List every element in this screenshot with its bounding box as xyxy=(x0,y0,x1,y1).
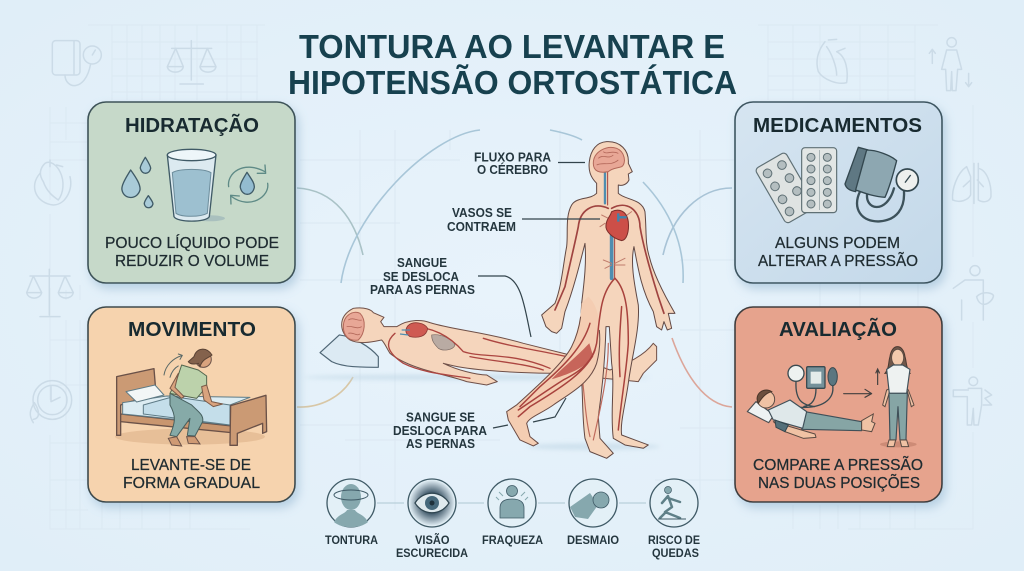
label: sangue se desloca para as pernas (lower): DESLOCA PARA xyxy=(393,424,487,438)
label: sangue se desloca para as pernas (lower): SANGUE SE xyxy=(406,410,475,424)
text: movimento description: LEVANTE-SE DE xyxy=(131,457,251,474)
symptom: tontura: TONTURA xyxy=(325,535,378,547)
heart xyxy=(606,210,629,241)
text: avaliação description: COMPARE A PRESSÃO xyxy=(753,454,923,474)
label: sangue se desloca para as pernas (upper) xyxy=(370,256,531,337)
panel: avaliação xyxy=(735,307,942,502)
stepping leg xyxy=(507,278,615,446)
symptom: risco de quedas xyxy=(648,479,700,560)
background icon: person with stomach xyxy=(953,266,993,320)
illustration: reclining body xyxy=(303,308,657,385)
text: avaliação description: NAS DUAS POSIÇÕES xyxy=(758,472,920,492)
lying figure xyxy=(342,308,657,385)
symptom: risco de quedas: QUEDAS xyxy=(652,548,699,560)
text: avaliação description xyxy=(753,454,923,492)
symptom: fraqueza xyxy=(482,479,543,547)
label: sangue se desloca para as pernas (lower): AS PERNAS xyxy=(406,437,475,451)
background icon: blood pressure cuff xyxy=(52,41,101,86)
standing figure xyxy=(542,142,675,458)
symptom: tontura xyxy=(325,479,378,547)
panel: medicamentos xyxy=(735,102,942,283)
text: movimento description: FORMA GRADUAL xyxy=(123,475,260,492)
arteries and veins xyxy=(555,170,664,440)
icon: water glass and drops xyxy=(122,149,268,221)
brain xyxy=(593,147,624,172)
panel: movimento xyxy=(88,307,295,502)
symptom: risco de quedas: RISCO DE xyxy=(648,535,700,547)
label: sangue se desloca para as pernas (upper): SANGUE xyxy=(397,256,447,270)
icon: pill blisters and cuff xyxy=(755,147,918,224)
text: movimento description xyxy=(123,457,260,492)
background icon: heart circulation xyxy=(35,160,71,205)
symptom: desmaio xyxy=(567,479,619,547)
label: vasos se contraem xyxy=(447,206,600,234)
symptom row xyxy=(325,479,700,560)
symptom: desmaio: DESMAIO xyxy=(567,535,619,547)
title: HIPOTENSÃO ORTOSTÁTICA xyxy=(288,64,737,101)
symptom: visão escurecida xyxy=(396,479,468,560)
label: fluxo para o cérebro xyxy=(474,150,585,177)
text: hidratação description: POUCO LÍQUIDO PODE xyxy=(105,233,279,252)
background icon: scale left xyxy=(27,269,73,317)
illustration: standing body with vessels xyxy=(507,142,675,458)
heading: movimento: MOVIMENTO xyxy=(128,319,256,341)
heading: avaliação: AVALIAÇÃO xyxy=(779,318,897,341)
label: fluxo para o cérebro: FLUXO PARA xyxy=(474,150,551,164)
background icon: person with arrows xyxy=(929,38,972,91)
background icon: scale top xyxy=(167,41,216,84)
text: medicamentos description: ALTERAR A PRESSÃO xyxy=(758,250,918,270)
label: sangue se desloca para as pernas (lower) xyxy=(393,398,566,451)
panel: hidratação xyxy=(88,102,295,283)
text: medicamentos description xyxy=(758,235,918,270)
symptom: visão escurecida: VISÃO xyxy=(415,534,450,547)
heading: hidratação: HIDRATAÇÃO xyxy=(125,114,259,137)
background icon: clock and drop xyxy=(30,381,72,423)
symptom: fraqueza: FRAQUEZA xyxy=(482,535,543,547)
label: sangue se desloca para as pernas (upper): SE DESLOCA xyxy=(383,270,459,284)
text: medicamentos description: ALGUNS PODEM xyxy=(775,235,900,252)
title xyxy=(288,28,737,101)
background icon: heart xyxy=(817,39,847,83)
text: hidratação description: REDUZIR O VOLUME xyxy=(115,253,269,270)
pillow xyxy=(320,335,378,367)
label: fluxo para o cérebro: O CÉREBRO xyxy=(477,162,548,177)
connector arcs xyxy=(297,130,732,407)
label: vasos se contraem: CONTRAEM xyxy=(447,220,516,234)
background icon: lungs xyxy=(953,163,991,203)
text: hidratação description xyxy=(105,233,279,270)
symptom: visão escurecida: ESCURECIDA xyxy=(396,548,468,560)
background icon: person pointing xyxy=(953,377,992,425)
icon: person rising from bed xyxy=(115,349,267,446)
label: sangue se desloca para as pernas (upper): PARA AS PERNAS xyxy=(370,283,475,297)
title: TONTURA AO LEVANTAR E xyxy=(299,28,725,65)
heading: medicamentos: MEDICAMENTOS xyxy=(753,115,922,137)
icon: pressure measured lying and standing xyxy=(747,347,917,447)
label: vasos se contraem: VASOS SE xyxy=(452,206,512,220)
